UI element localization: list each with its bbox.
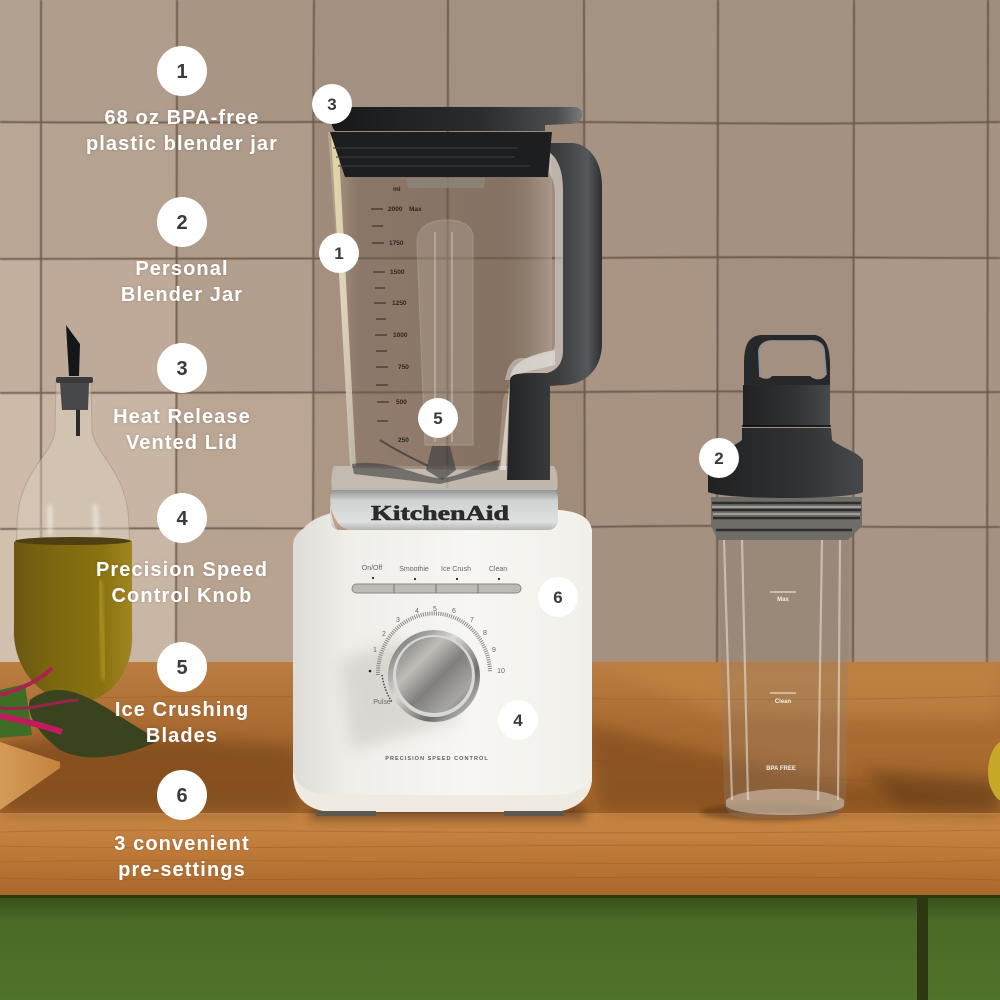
feature 2	[121, 197, 243, 306]
feature 4	[96, 493, 268, 607]
marker 4 knob	[498, 700, 538, 740]
measurement scale: 1750	[389, 240, 404, 247]
measurement scale: 1250	[392, 300, 407, 307]
speed control knob and dial	[369, 606, 505, 722]
feature 4: 4	[176, 508, 188, 530]
wooden countertop	[0, 662, 1000, 897]
olive oil bottle	[14, 325, 132, 702]
marker 6 presets: 6	[553, 588, 563, 607]
control label: PRECISION SPEED CONTROL	[385, 756, 489, 762]
feature 1: 1	[176, 61, 188, 83]
marker 1 jar: 1	[334, 244, 344, 263]
transparent blender jar	[328, 132, 555, 484]
preset buttons and labels: Smoothie	[399, 566, 429, 573]
measurement scale: Max	[409, 206, 422, 213]
feature 3: Vented Lid	[126, 432, 238, 454]
measurement scale: ml	[393, 186, 401, 193]
main blender	[293, 107, 602, 816]
feature 5	[115, 642, 249, 747]
speed control knob and dial: 3	[396, 617, 400, 624]
jar handle	[507, 143, 602, 480]
feature 5: Ice Crushing	[115, 699, 249, 721]
feature 5: Blades	[146, 725, 218, 747]
vented lid	[330, 107, 582, 188]
preset buttons and labels: Clean	[489, 566, 507, 573]
clear cup: BPA FREE	[766, 766, 796, 772]
shadow under personal jar	[700, 803, 840, 821]
marker 5 blades: 5	[433, 409, 443, 428]
measurement scale: 500	[396, 399, 407, 406]
tiled wall background	[0, 0, 1000, 664]
callout markers on product	[312, 84, 739, 740]
feature 3: Heat Release	[113, 406, 251, 428]
speed control knob and dial: 9	[492, 647, 496, 654]
green cabinet	[0, 895, 1000, 1000]
white motor base	[293, 510, 592, 816]
measurement scale: 750	[398, 364, 409, 371]
feature 5: 5	[176, 657, 188, 679]
measurement scale: 1000	[393, 332, 408, 339]
feature 6: 3 convenient	[114, 833, 250, 855]
shadow under blender	[310, 806, 585, 820]
preset buttons and labels: Ice Crush	[441, 566, 471, 573]
feature 1: 68 oz BPA-free	[104, 107, 260, 129]
feature 4: Precision Speed	[96, 559, 268, 581]
marker 3 lid	[312, 84, 352, 124]
feature 4: Control Knob	[112, 585, 252, 607]
feature 3	[113, 343, 251, 454]
personal blender jar	[708, 335, 863, 818]
KitchenAid logo: KitchenAid	[371, 501, 509, 525]
feature 2: Blender Jar	[121, 284, 243, 306]
threaded collar	[711, 497, 862, 540]
cutting board with beet greens	[0, 668, 160, 810]
clear cup: Max	[777, 597, 789, 603]
measurement scale: 250	[398, 437, 409, 444]
blade tower	[417, 220, 473, 445]
feature 2: 2	[176, 212, 188, 234]
preset buttons and labels: On/Off	[362, 565, 382, 572]
feature 3: 3	[176, 358, 188, 380]
preset buttons and labels	[352, 565, 521, 593]
measurement scale	[371, 186, 422, 444]
marker 4 knob: 4	[513, 711, 523, 730]
clear cup: Clean	[775, 699, 792, 705]
speed control knob and dial: 4	[415, 608, 419, 615]
clear cup	[718, 540, 850, 818]
ice crushing blades	[352, 440, 500, 484]
speed control knob and dial: Pulse	[373, 699, 391, 706]
feature 6: 6	[176, 785, 188, 807]
speed control knob and dial: 7	[470, 617, 474, 624]
measurement scale: 1500	[390, 269, 405, 276]
marker 1 jar	[319, 233, 359, 273]
speed control knob and dial: 5	[433, 606, 437, 613]
marker 5 blades	[418, 398, 458, 438]
carry cap	[708, 335, 863, 498]
measurement scale: 2000	[388, 206, 403, 213]
speed control knob and dial: 2	[382, 631, 386, 638]
marker 2 personal jar	[699, 438, 739, 478]
feature 1	[86, 46, 278, 155]
marker 2 personal jar: 2	[714, 449, 724, 468]
feature 2: Personal	[135, 258, 229, 280]
marker 3 lid: 3	[327, 95, 337, 114]
feature 6: pre-settings	[118, 859, 246, 881]
speed control knob and dial: 10	[497, 668, 505, 675]
lemon at right edge	[988, 742, 1000, 800]
feature list	[86, 46, 278, 881]
speed control knob and dial: 8	[483, 630, 487, 637]
clear collar and silver band	[330, 466, 558, 530]
feature 1: plastic blender jar	[86, 133, 278, 155]
marker 6 presets	[538, 577, 578, 617]
feature 6	[114, 770, 250, 881]
speed control knob and dial: 1	[373, 647, 377, 654]
speed control knob and dial: 6	[452, 608, 456, 615]
